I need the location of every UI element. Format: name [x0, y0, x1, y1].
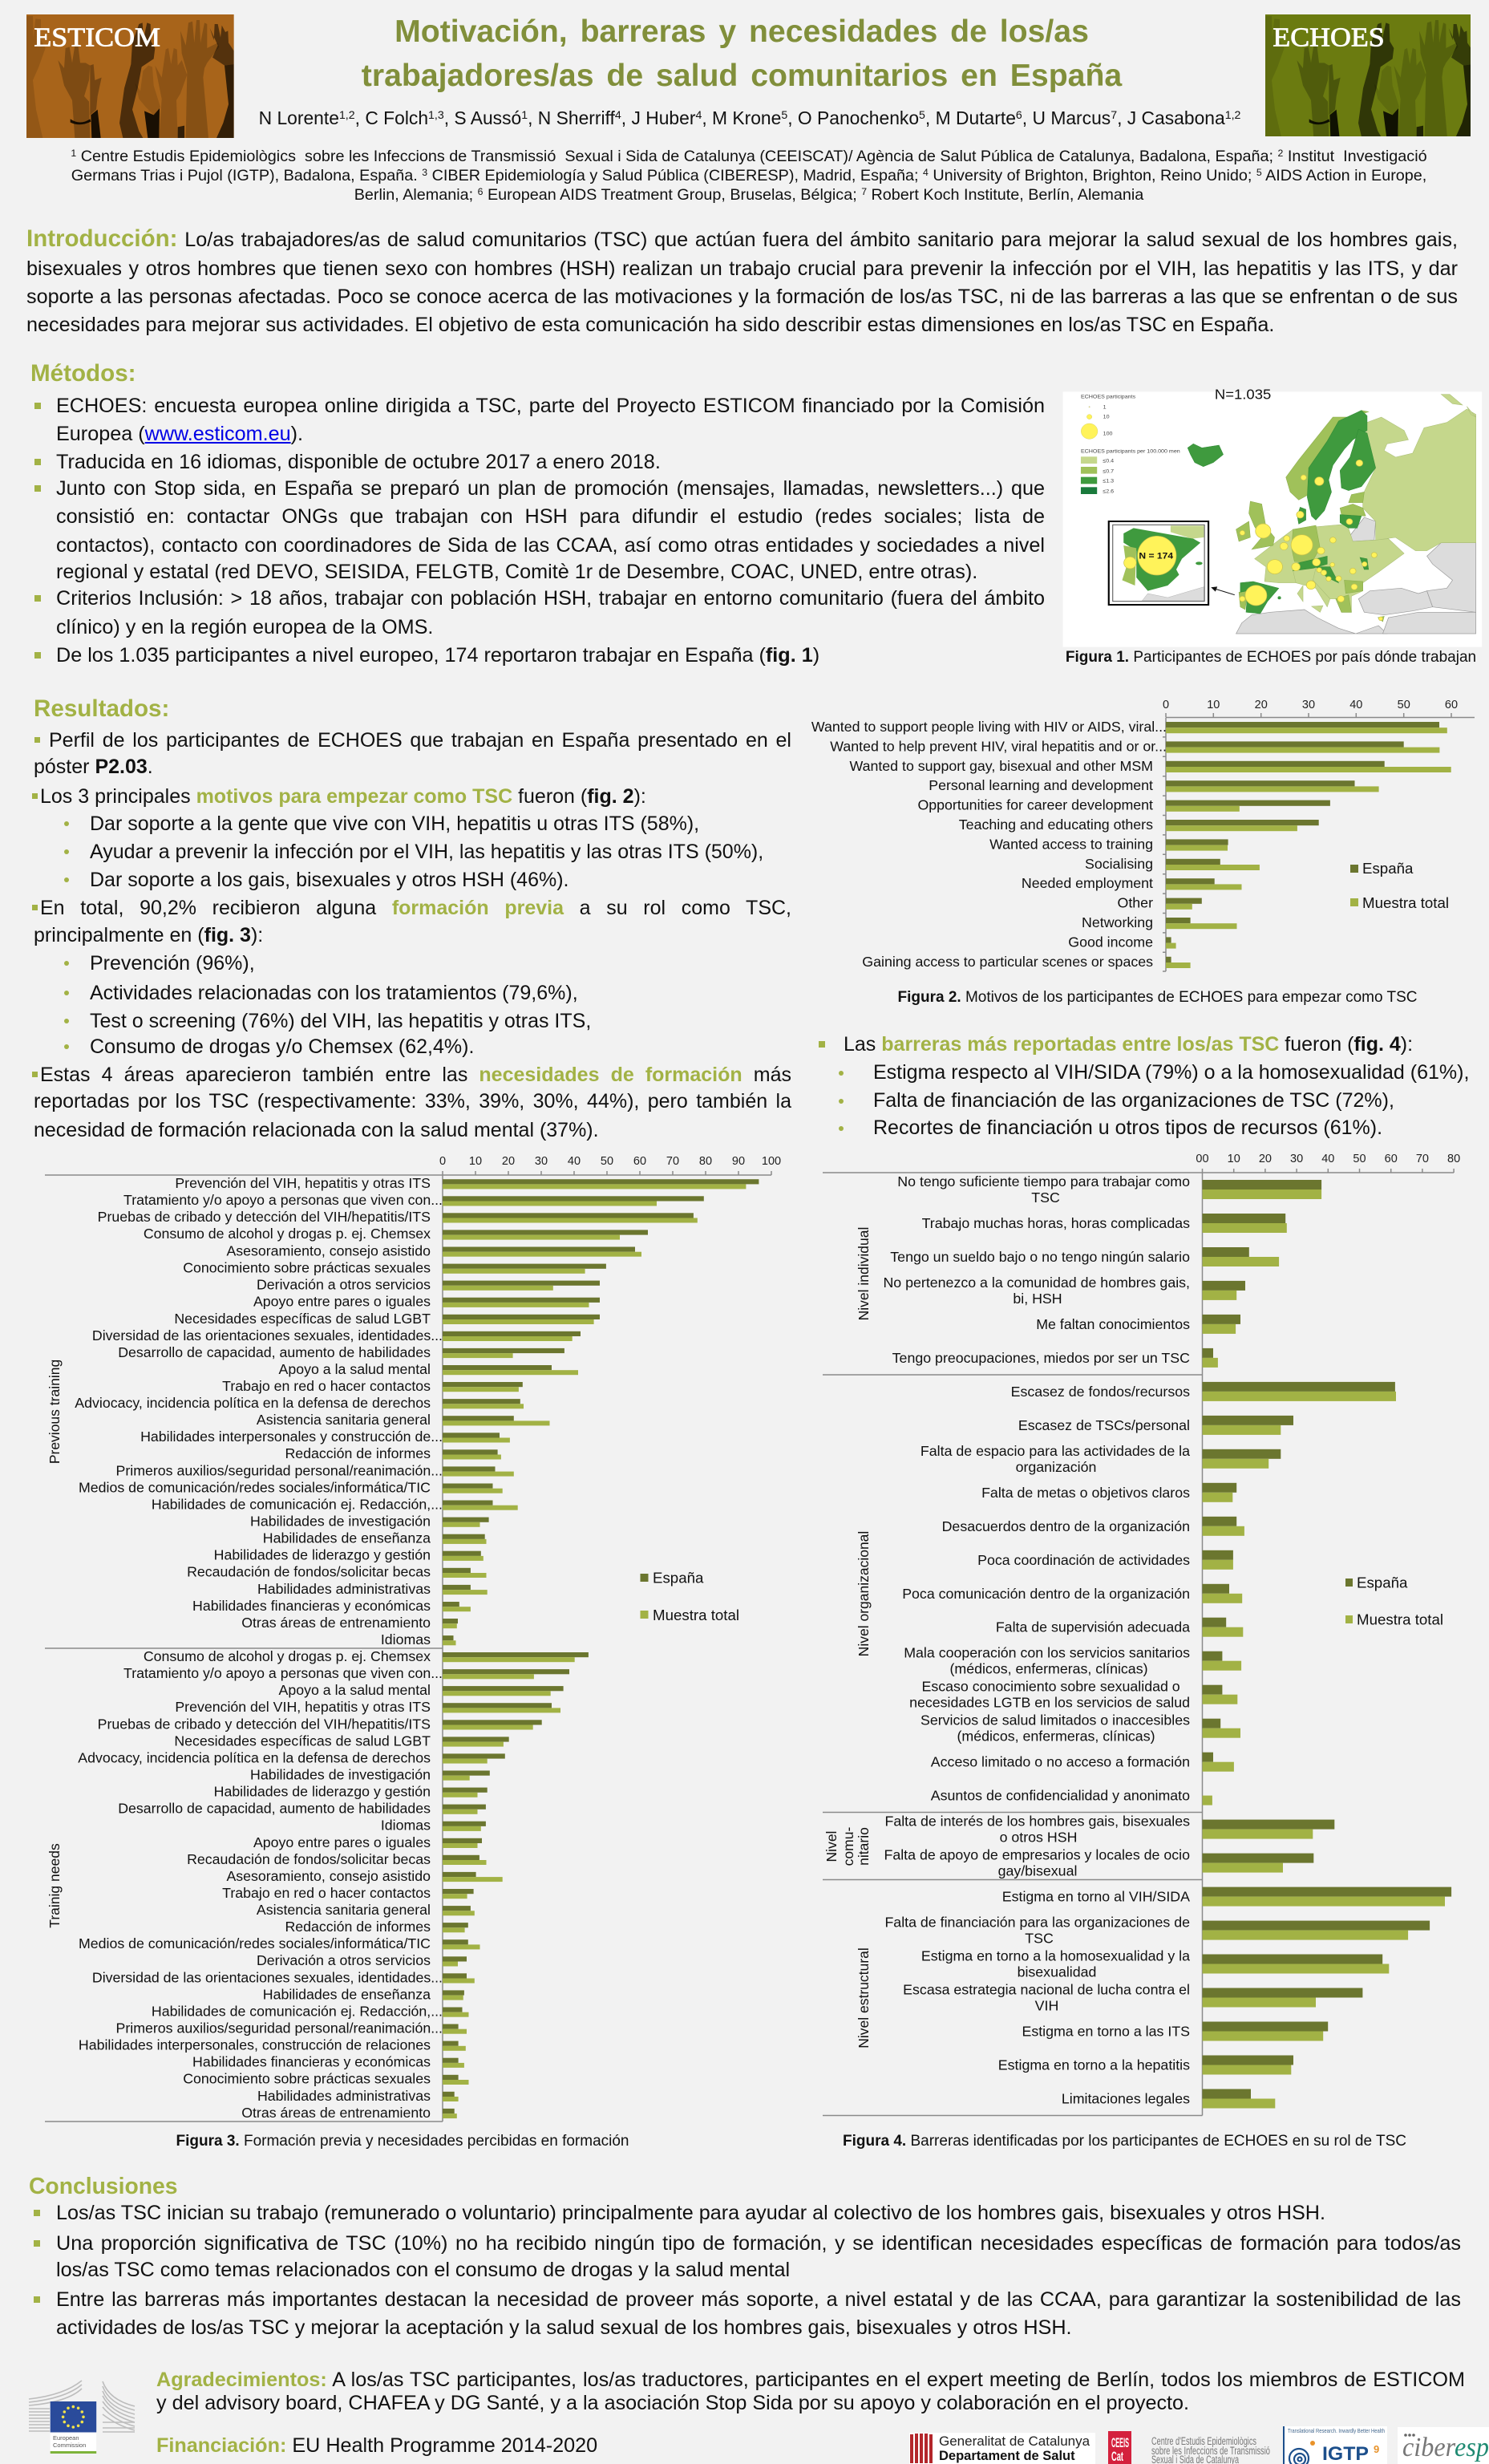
- axis labels: 20: [1255, 699, 1268, 711]
- map legend: ≤0.7: [1103, 468, 1114, 474]
- row labels: previous training: Recaudación de fondos/solicitar becas: [187, 1564, 431, 1580]
- logo: ESTICOM: [26, 14, 234, 138]
- panel: barreras: Falta de financiación de las organizaciones de TSC (72%),: [873, 1089, 1394, 1112]
- panel: conclusiones: Entre las barreras más importantes destacan la necesidad de proveer más soporte, a nivel estatal y de las CCAA, para garantizar la sostenibilidad de las: [56, 2288, 1461, 2311]
- row labels: No pertenezco a la comunidad de hombres gais,: [883, 1275, 1190, 1291]
- axis labels: [439, 1155, 781, 1168]
- row labels: previous training: [75, 1175, 443, 1647]
- row labels: Acceso limitado o no acceso a formación: [931, 1754, 1190, 1770]
- panel: métodos: [30, 360, 1045, 667]
- row labels: previous training: Apoyo a la salud mental: [279, 1361, 431, 1377]
- panel: resultados: Dar soporte a la gente que vive con VIH, hepatitis u otras ITS (58%),: [90, 813, 699, 835]
- row labels: necesidades LGTB en los servicios de salud: [909, 1695, 1190, 1711]
- row labels: Teaching and educating others: [959, 817, 1153, 833]
- group label: nivel estructural: Nivel estructural: [856, 1947, 872, 2049]
- row labels: training needs: Consumo de alcohol y drogas p. ej. Chemsex: [144, 1648, 431, 1664]
- row labels: Escaso conocimiento sobre sexualidad o: [921, 1679, 1180, 1695]
- axis and separators: [823, 1169, 1454, 2116]
- row labels: training needs: Habilidades de liderazgo y gestión: [214, 1784, 431, 1800]
- row labels: Networking: [1082, 914, 1153, 930]
- panel: agradecimientos: Agradecimientos: A los/as TSC participantes, los/as traductores, participantes en el expert meeting de Berlín, todos los miembros de ESTICOM: [156, 2369, 1465, 2391]
- row labels: TSC: [1025, 1931, 1054, 1947]
- row labels: previous training: Primeros auxilios/seguridad personal/reanimación...: [116, 1463, 443, 1479]
- panel: resultados: póster P2.03.: [34, 756, 153, 778]
- row labels: (médicos, enfermeras, clínicas): [949, 1661, 1148, 1677]
- neighbouring countries in grey: [1236, 517, 1476, 634]
- row labels: Estigma en torno al VIH/SIDA: [1002, 1889, 1190, 1905]
- axis labels: 60: [1445, 699, 1458, 711]
- row labels: Personal learning and development: [929, 777, 1153, 793]
- logo: Generalitat de Catalunya: [909, 2433, 1095, 2464]
- row labels: training needs: Habilidades interpersonales, construcción de relaciones: [79, 2037, 431, 2053]
- row labels: training needs: Necesidades específicas de salud LGBT: [174, 1732, 431, 1749]
- row labels: previous training: Medios de comunicación/redes sociales/informática/TIC: [79, 1479, 431, 1495]
- caption: figura 3: Figura 3. Formación previa y necesidades percibidas en formación: [176, 2133, 629, 2150]
- logo: IGTP: [1283, 2426, 1387, 2464]
- row labels: Poca comunicación dentro de la organización: [902, 1586, 1190, 1602]
- row labels: Other: [1118, 895, 1153, 911]
- map legend: ≤2.6: [1103, 488, 1114, 494]
- row labels: Estigma en torno a la hepatitis: [998, 2057, 1190, 2073]
- caption: figura 1: Figura 1. Participantes de ECHOES por país dónde trabajan: [1066, 649, 1476, 666]
- legend: España: [653, 1569, 704, 1587]
- row labels: bi, HSH: [1013, 1291, 1062, 1307]
- row labels: training needs: Pruebas de cribado y detección del VIH/hepatitis/ITS: [98, 1716, 431, 1732]
- row labels: previous training: Desarrollo de capacidad, aumento de habilidades: [118, 1344, 431, 1360]
- participant circles: [1240, 460, 1382, 621]
- map legend: 10: [1103, 415, 1110, 420]
- axis labels: 20: [502, 1155, 515, 1168]
- axis labels: 40: [1349, 699, 1362, 711]
- panel: resultados: Actividades relacionadas con los tratamientos (79,6%),: [90, 982, 578, 1004]
- panel: métodos: Criterios Inclusión: > 18 años, trabajar con población HSH, trabajar en entorno comunitario (fuera del ámbito: [56, 587, 1045, 610]
- inset: España: [1109, 521, 1208, 605]
- row labels: Desacuerdos dentro de la organización: [942, 1518, 1190, 1534]
- legend: Muestra total: [1357, 1611, 1443, 1628]
- heading: resultados: Resultados:: [34, 695, 169, 722]
- row labels: Falta de financiación para las organizaciones de: [884, 1915, 1190, 1931]
- group label: nivel individual: Nivel individual: [856, 1227, 872, 1320]
- panel: resultados: reportadas por los TSC (respectivamente: 33%, 39%, 30%, 44%), pero también la: [34, 1090, 791, 1112]
- row labels: training needs: Conocimiento sobre prácticas sexuales: [183, 2071, 431, 2087]
- row labels: training needs: Asistencia sanitaria general: [257, 1902, 431, 1918]
- row labels: [811, 719, 1167, 970]
- row labels: Falta de supervisión adecuada: [996, 1619, 1190, 1635]
- group label: nivel organizacional: Nivel organizacional: [856, 1531, 872, 1656]
- row labels: previous training: Habilidades administrativas: [257, 1581, 431, 1597]
- panel: métodos: ECHOES: encuesta europea online dirigida a TSC, parte del Proyecto ESTICOM financiado por la Comisión: [56, 395, 1045, 417]
- row labels: Needed employment: [1022, 875, 1153, 891]
- row labels: previous training: Habilidades de liderazgo y gestión: [214, 1546, 431, 1562]
- row labels: training needs: Medios de comunicación/redes sociales/informática/TIC: [79, 1935, 431, 1951]
- panel: resultados: Consumo de drogas y/o Chemsex (62,4%).: [90, 1035, 474, 1058]
- axis labels: 20: [1259, 1153, 1272, 1165]
- chart: figura 3 formación: [45, 1155, 781, 2122]
- panel: agradecimientos: y del advisory board, CHAFEA y DG Santé, y a la asociación Stop Sida por su apoyo y colaboración en el proyecto.: [156, 2392, 1189, 2414]
- panel: resultados: Dar soporte a los gais, bisexuales y otros HSH (46%).: [90, 869, 568, 891]
- bars: [1166, 722, 1451, 968]
- row labels: Wanted to support people living with HIV or AIDS, viral...: [811, 719, 1167, 735]
- panel: métodos: regional y estatal (red DEVO, SEISIDA, FELGTB, Comitè 1r de Desembre, COAC, UNED, entre otras).: [56, 561, 977, 583]
- legend: Muestra total: [1362, 894, 1449, 911]
- panel: conclusiones: [29, 2173, 1461, 2339]
- logo: ECHOES: [1265, 14, 1471, 136]
- row labels: Trabajo muchas horas, horas complicadas: [922, 1215, 1190, 1231]
- logo: IGTP: 9: [1374, 2443, 1379, 2455]
- row labels: training needs: Diversidad de las orientaciones sexuales, identidades...: [92, 1970, 443, 1986]
- caption: figura 4: Figura 4. Barreras identificadas por los participantes de ECHOES en su rol de TSC: [843, 2133, 1406, 2150]
- panel: barreras: Estigma respecto al VIH/SIDA (79%) o a la homosexualidad (61%),: [873, 1061, 1469, 1084]
- financiación: Financiación: EU Health Programme 2014-2020: [156, 2434, 597, 2457]
- axis labels: 40: [568, 1155, 581, 1168]
- map legend: ≤1.3: [1103, 479, 1114, 484]
- row labels: training needs: Derivación a otros servicios: [257, 1952, 431, 1968]
- axis labels: 70: [1416, 1153, 1429, 1165]
- row labels: training needs: Asesoramiento, consejo asistido: [226, 1868, 431, 1884]
- panel: resultados: principalmente en (fig. 3):: [34, 924, 263, 946]
- row labels: Falta de espacio para las actividades de la: [921, 1443, 1190, 1459]
- legend: [1350, 860, 1449, 911]
- axis and separators: [45, 1171, 771, 2122]
- row labels: previous training: Necesidades específicas de salud LGBT: [174, 1311, 431, 1327]
- row labels: training needs: Idiomas: [381, 1818, 431, 1834]
- row labels: Gaining access to particular scenes or spaces: [862, 954, 1153, 970]
- logo: Generalitat de Catalunya: Departament de Salut: [939, 2449, 1075, 2463]
- panel: conclusiones: Los/as TSC inician su trabajo (remunerado o voluntario) principalmente para ayudar al colectivo de los hombres gais, bisexuales y otros HSH.: [56, 2202, 1325, 2224]
- axis labels: 30: [1302, 699, 1315, 711]
- row labels: No tengo suficiente tiempo para trabajar como: [897, 1173, 1190, 1189]
- legend: España: [1362, 860, 1414, 877]
- panel: resultados: Test o screening (76%) del VIH, las hepatitis y otras ITS,: [90, 1010, 591, 1032]
- authors: N Lorente1,2, C Folch1,3, S Aussó1, N Sherriff4, J Huber4, M Krone5, O Panochenko5, M Dutarte6, U Marcus7, J Casabona1,2: [259, 107, 1240, 128]
- axis labels: 50: [601, 1155, 613, 1168]
- logo: European Commission: European: [53, 2434, 79, 2442]
- panel: resultados: [32, 695, 792, 1141]
- axis labels: 60: [1385, 1153, 1398, 1165]
- axis labels: 50: [1353, 1153, 1366, 1165]
- group label: nivel comunitario: Nivel: [823, 1831, 840, 1862]
- row labels: o otros HSH: [1000, 1830, 1077, 1846]
- row labels: training needs: Habilidades de investigación: [250, 1766, 431, 1782]
- panel: barreras: Las barreras más reportadas entre los/as TSC fueron (fig. 4):: [844, 1033, 1413, 1056]
- row labels: previous training: Tratamiento y/o apoyo a personas que viven con...: [123, 1192, 443, 1208]
- row labels: previous training: Trabajo en red o hacer contactos: [222, 1378, 431, 1394]
- title: [362, 14, 1123, 93]
- row labels: training needs: Apoyo entre pares o iguales: [253, 1834, 431, 1850]
- axis labels: 10: [469, 1155, 482, 1168]
- row labels: Socialising: [1085, 856, 1153, 872]
- row labels: previous training: Habilidades de investigación: [250, 1513, 431, 1529]
- heading: métodos: Métodos:: [30, 360, 136, 387]
- arrow: [1212, 587, 1235, 595]
- row labels: VIH: [1035, 1997, 1058, 2013]
- row labels: training needs: Advocacy, incidencia política en la defensa de derechos: [78, 1750, 431, 1766]
- logo: ESTICOM: ESTICOM: [34, 23, 160, 53]
- logo: European Commission: [29, 2381, 135, 2454]
- row labels: Opportunities for career development: [917, 797, 1153, 813]
- panel: resultados: necesidad de formación relacionada con la salud mental (37%).: [34, 1119, 599, 1141]
- legend: Muestra total: [653, 1607, 739, 1623]
- group label: nivel comunitario: [823, 1827, 872, 1866]
- row labels: [883, 1173, 1190, 2106]
- title: trabajadores/as de salud comunitarios en España: [362, 59, 1122, 93]
- row labels: training needs: Desarrollo de capacidad, aumento de habilidades: [118, 1800, 431, 1816]
- legend: España: [1357, 1574, 1408, 1591]
- row labels: Poca coordinación de actividades: [977, 1552, 1190, 1568]
- panel: resultados: Ayudar a prevenir la infección por el VIH, las hepatitis y las otras ITS (50%),: [90, 841, 763, 863]
- row labels: training needs: Habilidades de comunicación ej. Redacción,...: [152, 2004, 443, 2020]
- row labels: Tengo un sueldo bajo o no tengo ningún salario: [890, 1249, 1190, 1265]
- panel: introducción: bisexuales y otros hombres que tienen sexo con hombres (HSH) realizan un trabajo crucial para prevenir la infección por el VIH, las hepatitis y las ITS, y dar: [26, 257, 1458, 280]
- logo: ciberesp: ciberesp: [1402, 2433, 1489, 2462]
- row labels: training needs: Tratamiento y/o apoyo a personas que viven con...: [123, 1665, 443, 1681]
- row labels: training needs: Trabajo en red o hacer contactos: [222, 1885, 431, 1901]
- map legend: ECHOES participants: [1081, 395, 1136, 400]
- panel: métodos: Junto con Stop sida, en España se preparó un plan de promoción (mensajes, llamadas, newsletters...) que: [56, 477, 1045, 500]
- row labels: previous training: Habilidades interpersonales y construcción de...: [140, 1429, 443, 1445]
- row labels: Falta de metas o objetivos claros: [981, 1485, 1190, 1501]
- group label: previous training: Previous training: [47, 1360, 63, 1464]
- row labels: training needs: Otras áreas de entrenamiento: [241, 2105, 431, 2121]
- axis labels: 10: [1228, 1153, 1240, 1165]
- axis labels: [1196, 1153, 1460, 1165]
- bars: previous training: [443, 1179, 759, 1645]
- panel: agradecimientos: [156, 2369, 1465, 2414]
- row labels: previous training: Diversidad de las orientaciones sexuales, identidades...: [92, 1327, 443, 1343]
- axis labels: 30: [1290, 1153, 1303, 1165]
- axis labels: 0: [1163, 699, 1169, 711]
- row labels: training needs: Habilidades de enseñanza: [263, 1986, 431, 2002]
- row labels: bisexualidad: [1018, 1964, 1096, 1980]
- title: Motivación, barreras y necesidades de los/as: [395, 14, 1089, 49]
- row labels: training needs: Prevención del VIH, hepatitis y otras ITS: [175, 1699, 431, 1715]
- bars: training needs: [443, 1652, 589, 2118]
- row labels: gay/bisexual: [998, 1863, 1077, 1879]
- axis: [1163, 713, 1475, 971]
- map legend: ≤0.4: [1103, 459, 1114, 464]
- row labels: Estigma en torno a la homosexualidad y la: [921, 1947, 1190, 1964]
- logo: European Commission: Commission: [53, 2442, 86, 2449]
- panel: conclusiones: Una proporción significativa de TSC (10%) no ha recibido ningún tipo de formación, y se identifican necesidades específicas de formación para todos/as: [56, 2232, 1461, 2255]
- row labels: training needs: Habilidades administrativas: [257, 2088, 431, 2104]
- panel: introducción: necesidades para mejorar sus actividades. El objetivo de esta comunicación ha sido describir estas dimensiones en los/as TSC en España.: [26, 314, 1274, 336]
- panel: resultados: Los 3 principales motivos para empezar como TSC fueron (fig. 2):: [40, 785, 646, 808]
- row labels: training needs: Primeros auxilios/seguridad personal/reanimación...: [116, 2020, 443, 2036]
- row labels: Wanted to support gay, bisexual and other MSM: [849, 758, 1153, 774]
- axis labels: 100: [762, 1155, 781, 1168]
- panel: barreras: [819, 1033, 1469, 1139]
- row labels: Asuntos de confidencialidad y anonimato: [931, 1788, 1190, 1804]
- panel: introducción: Introducción: Lo/as trabajadores/as de salud comunitarios (TSC) que actúan fuera del ámbito sanitario para mejorar la salud sexual de los hombres gais,: [26, 225, 1458, 252]
- axis labels: 60: [633, 1155, 646, 1168]
- axis labels: 10: [1207, 699, 1220, 711]
- logo: ECHOES: ECHOES: [1273, 23, 1385, 53]
- axis labels: 0: [439, 1155, 446, 1168]
- row labels: previous training: Consumo de alcohol y drogas p. ej. Chemsex: [144, 1226, 431, 1242]
- axis labels: 30: [535, 1155, 548, 1168]
- axis labels: 80: [699, 1155, 712, 1168]
- bars: [1203, 1180, 1451, 2108]
- row labels: Escasa estrategia nacional de lucha contra el: [903, 1981, 1190, 1997]
- axis labels: 70: [666, 1155, 679, 1168]
- map legend: 100: [1103, 432, 1113, 437]
- row labels: Escasez de TSCs/personal: [1018, 1417, 1190, 1433]
- row labels: Wanted access to training: [989, 836, 1153, 852]
- panel: métodos: Traducida en 16 idiomas, disponible de octubre 2017 a enero 2018.: [56, 451, 661, 473]
- affiliations: [71, 148, 1427, 204]
- logo: Generalitat de Catalunya: Generalitat de Catalunya: [939, 2434, 1090, 2449]
- row labels: previous training: Redacción de informes: [285, 1445, 431, 1461]
- axis labels: 80: [1447, 1153, 1460, 1165]
- axis labels: 50: [1398, 699, 1410, 711]
- map total N: N=1.035: [1215, 387, 1271, 402]
- group label: training needs: Trainig needs: [47, 1843, 63, 1928]
- legend: [640, 1569, 739, 1623]
- row labels: TSC: [1031, 1189, 1060, 1206]
- chart: figura 4 barreras: [823, 1153, 1460, 2116]
- logo: CEEISCAT: Cat: [1111, 2449, 1123, 2464]
- row labels: training needs: [78, 1648, 443, 2121]
- row labels: Tengo preocupaciones, miedos por ser un TSC: [892, 1350, 1190, 1366]
- panel: métodos: De los 1.035 participantes a nivel europeo, 174 reportaron trabajar en España (fig. 1): [56, 644, 819, 667]
- row labels: previous training: Habilidades de comunicación ej. Redacción,...: [152, 1497, 443, 1513]
- map legend: [1081, 395, 1180, 494]
- caption: figura 2: Figura 2. Motivos de los participantes de ECHOES para empezar como TSC: [897, 989, 1418, 1006]
- legend: [1345, 1574, 1443, 1628]
- panel: barreras: Recortes de financiación u otros tipos de recursos (61%).: [873, 1116, 1382, 1139]
- affiliations: Germans Trias i Pujol (IGTP), Badalona, España. 3 CIBER Epidemiología y Salud Pública (CIBERESP), Madrid, España; 4 University of Brighton, Brighton, Reino Unido; 5 AIDS Action in Europe,: [71, 167, 1426, 184]
- row labels: training needs: Redacción de informes: [285, 1919, 431, 1935]
- logo: CEEISCAT: [1108, 2431, 1270, 2464]
- map: participantes por país: [1063, 387, 1482, 646]
- row labels: training needs: Habilidades financieras y económicas: [192, 2053, 431, 2069]
- chart: figura 2 motivos: [811, 699, 1475, 972]
- panel: conclusiones: los/as TSC como temas relacionados con el consumo de drogas y la salud mental: [56, 2259, 790, 2281]
- heading: conclusiones: Conclusiones: [29, 2173, 178, 2199]
- panel: introducción: soporte a las personas afectadas. Poco se conoce acerca de las motivaciones y la formación de los/as TSC, ni de las barreras a las que se enfrentan o de sus: [26, 286, 1458, 308]
- panel: métodos: contactos), contacto con coordinadores de Sida de las CCAA, así como otras entidades y sociedades a nivel: [56, 534, 1045, 557]
- group label: nivel comunitario: nitario: [856, 1827, 872, 1866]
- panel: resultados: En total, 90,2% recibieron alguna formación previa a su rol como TSC,: [40, 897, 791, 919]
- row labels: previous training: Adviocacy, incidencia política en la defensa de derechos: [75, 1395, 431, 1411]
- row labels: Falta de interés de los hombres gais, bisexuales: [884, 1814, 1190, 1830]
- axis labels: 00: [1196, 1153, 1209, 1165]
- axis labels: [1163, 699, 1458, 711]
- affiliations: Berlin, Alemania; 6 European AIDS Treatment Group, Bruselas, Bélgica; 7 Robert Koch Institute, Berlín, Alemania: [354, 186, 1143, 204]
- row labels: previous training: Idiomas: [381, 1631, 431, 1647]
- map legend: ECHOES participants per 100.000 men: [1081, 448, 1180, 454]
- row labels: Mala cooperación con los servicios sanitarios: [904, 1645, 1190, 1661]
- panel: resultados: Perfil de los participantes de ECHOES que trabajan en España presentado en el: [49, 729, 791, 752]
- row labels: previous training: Pruebas de cribado y detección del VIH/hepatitis/ITS: [98, 1209, 431, 1225]
- panel: métodos: consistió en: contactar ONGs que trabajan con HSH para difundir el estudio (redes sociales; lista de: [56, 505, 1045, 528]
- row labels: previous training: Derivación a otros servicios: [257, 1277, 431, 1293]
- row labels: previous training: Apoyo entre pares o iguales: [253, 1293, 431, 1309]
- row labels: Limitaciones legales: [1062, 2090, 1190, 2106]
- row labels: previous training: Habilidades de enseñanza: [263, 1530, 431, 1546]
- row labels: organización: [1016, 1459, 1096, 1475]
- row labels: Estigma en torno a las ITS: [1022, 2023, 1190, 2039]
- panel: métodos: clínico) y en la región europea de la OMS.: [56, 616, 433, 638]
- map legend: 1: [1103, 404, 1107, 410]
- row labels: Falta de apoyo de empresarios y locales de ocio: [884, 1847, 1190, 1863]
- row labels: training needs: Apoyo a la salud mental: [279, 1682, 431, 1698]
- row labels: previous training: Prevención del VIH, hepatitis y otras ITS: [175, 1175, 431, 1191]
- panel: métodos: Europea (www.esticom.eu).: [56, 423, 303, 445]
- row labels: previous training: Otras áreas de entrenamiento: [241, 1615, 431, 1631]
- row labels: Servicios de salud limitados o inaccesibles: [921, 1712, 1190, 1728]
- countries by participants per 100.000 men: [1255, 395, 1476, 612]
- row labels: previous training: Conocimiento sobre prácticas sexuales: [183, 1259, 431, 1275]
- panel: resultados: Prevención (96%),: [90, 952, 255, 975]
- row labels: Me faltan conocimientos: [1036, 1316, 1190, 1332]
- affiliations: 1 Centre Estudis Epidemiològics sobre les Infeccions de Transmissió Sexual i Sida de Catalunya (CEEISCAT)/ Agència de Salut Pública de Catalunya, Badalona, España; 2 Institut Investigació: [71, 148, 1427, 165]
- row labels: Good income: [1068, 934, 1153, 950]
- row labels: training needs: Recaudación de fondos/solicitar becas: [187, 1851, 431, 1867]
- row labels: (médicos, enfermeras, clínicas): [957, 1728, 1155, 1745]
- panel: introducción: [26, 225, 1458, 336]
- axis labels: 90: [732, 1155, 745, 1168]
- panel: resultados: Estas 4 áreas aparecieron también entre las necesidades de formación más: [40, 1064, 791, 1086]
- row labels: previous training: Habilidades financieras y económicas: [192, 1598, 431, 1614]
- inset: España: N = 174: [1139, 551, 1174, 561]
- row labels: Wanted to help prevent HIV, viral hepatitis and or or...: [830, 738, 1167, 754]
- row labels: Escasez de fondos/recursos: [1011, 1384, 1190, 1400]
- group label: nivel comunitario: comu-: [840, 1827, 856, 1866]
- row labels: previous training: Asistencia sanitaria general: [257, 1412, 431, 1428]
- row labels: previous training: Asesoramiento, consejo asistido: [226, 1243, 431, 1259]
- axis labels: 40: [1321, 1153, 1334, 1165]
- logo: CEEISCAT: CEEIS: [1111, 2435, 1129, 2450]
- panel: conclusiones: actividades de los/as TSC y mejorar la aceptación y la salud sexual de los hombres gais, bisexuales y otros HSH.: [56, 2316, 1072, 2339]
